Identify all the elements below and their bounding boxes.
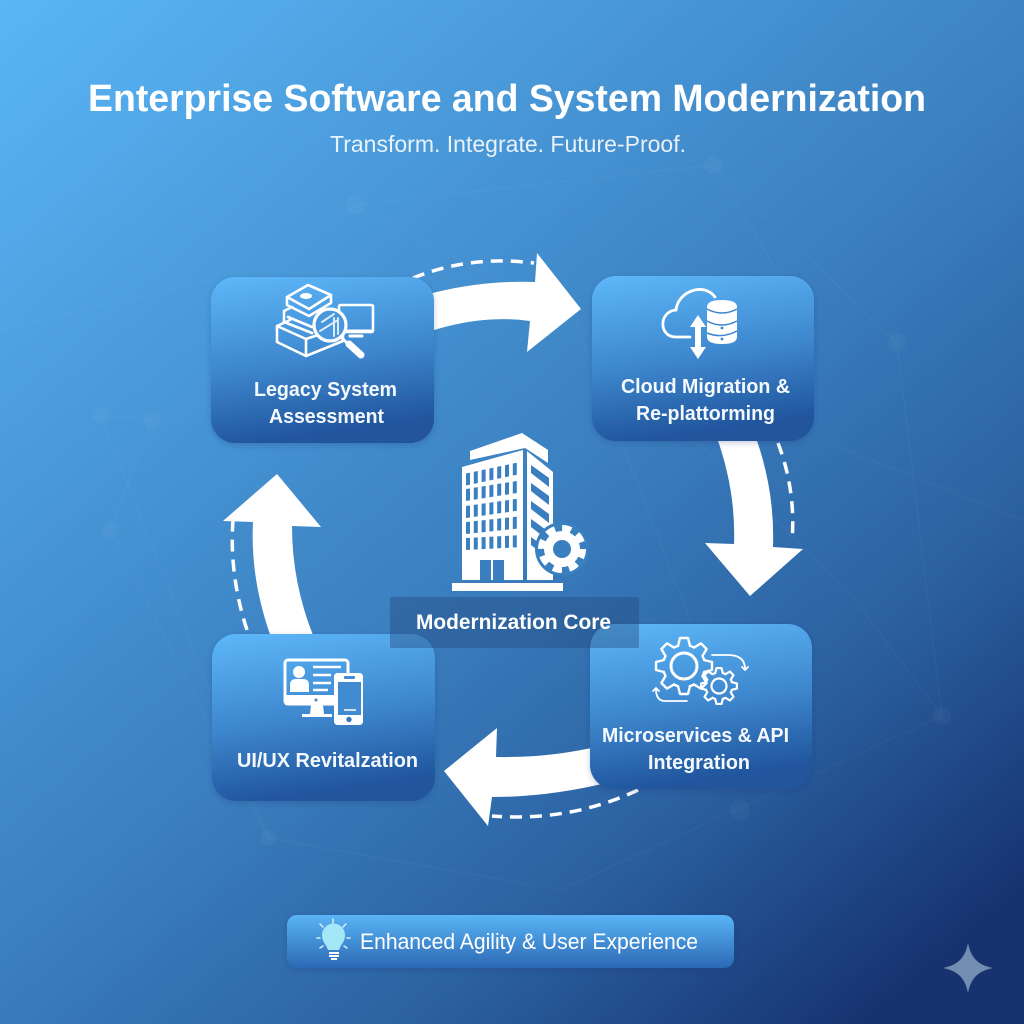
label: modernization core <box>390 597 639 648</box>
arrow: UI/UX to assessment <box>223 474 321 640</box>
icon: cloud and database <box>663 289 737 359</box>
label: microservices: Microservices & API <box>602 725 789 747</box>
label: legacy system assessment: Legacy System <box>254 379 397 401</box>
panel: legacy system assessment <box>211 277 434 443</box>
label: legacy system assessment: Assessment <box>269 406 384 428</box>
panel: UI/UX revitalization <box>212 634 435 801</box>
icon: corner sparkle <box>943 943 993 993</box>
arrow: microservices to UI/UX <box>444 728 638 826</box>
label: cloud migration: Cloud Migration & <box>621 376 790 398</box>
icon: light bulb <box>317 919 350 959</box>
text: benefit: Enhanced Agility & User Experience <box>360 929 698 954</box>
callout: benefit bar <box>287 915 734 968</box>
icon: legacy stack with magnifier <box>277 285 373 356</box>
arrow: assessment to cloud <box>413 253 581 352</box>
panel: cloud migration <box>592 276 814 441</box>
panel: microservices <box>590 624 812 789</box>
subtitle: Transform. Integrate. Future-Proof. <box>330 131 686 157</box>
label: microservices: Integration <box>648 752 750 774</box>
label: modernization core: Modernization Core <box>416 611 611 634</box>
icon: gears <box>653 638 748 704</box>
label: UI/UX revitalization: UI/UX Revitalzation <box>237 750 418 772</box>
label: cloud migration <box>621 376 790 425</box>
label: microservices <box>602 725 789 774</box>
background network pattern <box>0 156 1024 890</box>
icon: building with gear <box>452 433 589 591</box>
label: legacy system assessment <box>254 379 397 428</box>
label: cloud migration: Re-plattorming <box>636 403 775 425</box>
title: Enterprise Software and System Modernization <box>88 78 926 120</box>
arrow: cloud to microservices <box>705 435 803 596</box>
icon: monitor and phone <box>285 660 363 725</box>
